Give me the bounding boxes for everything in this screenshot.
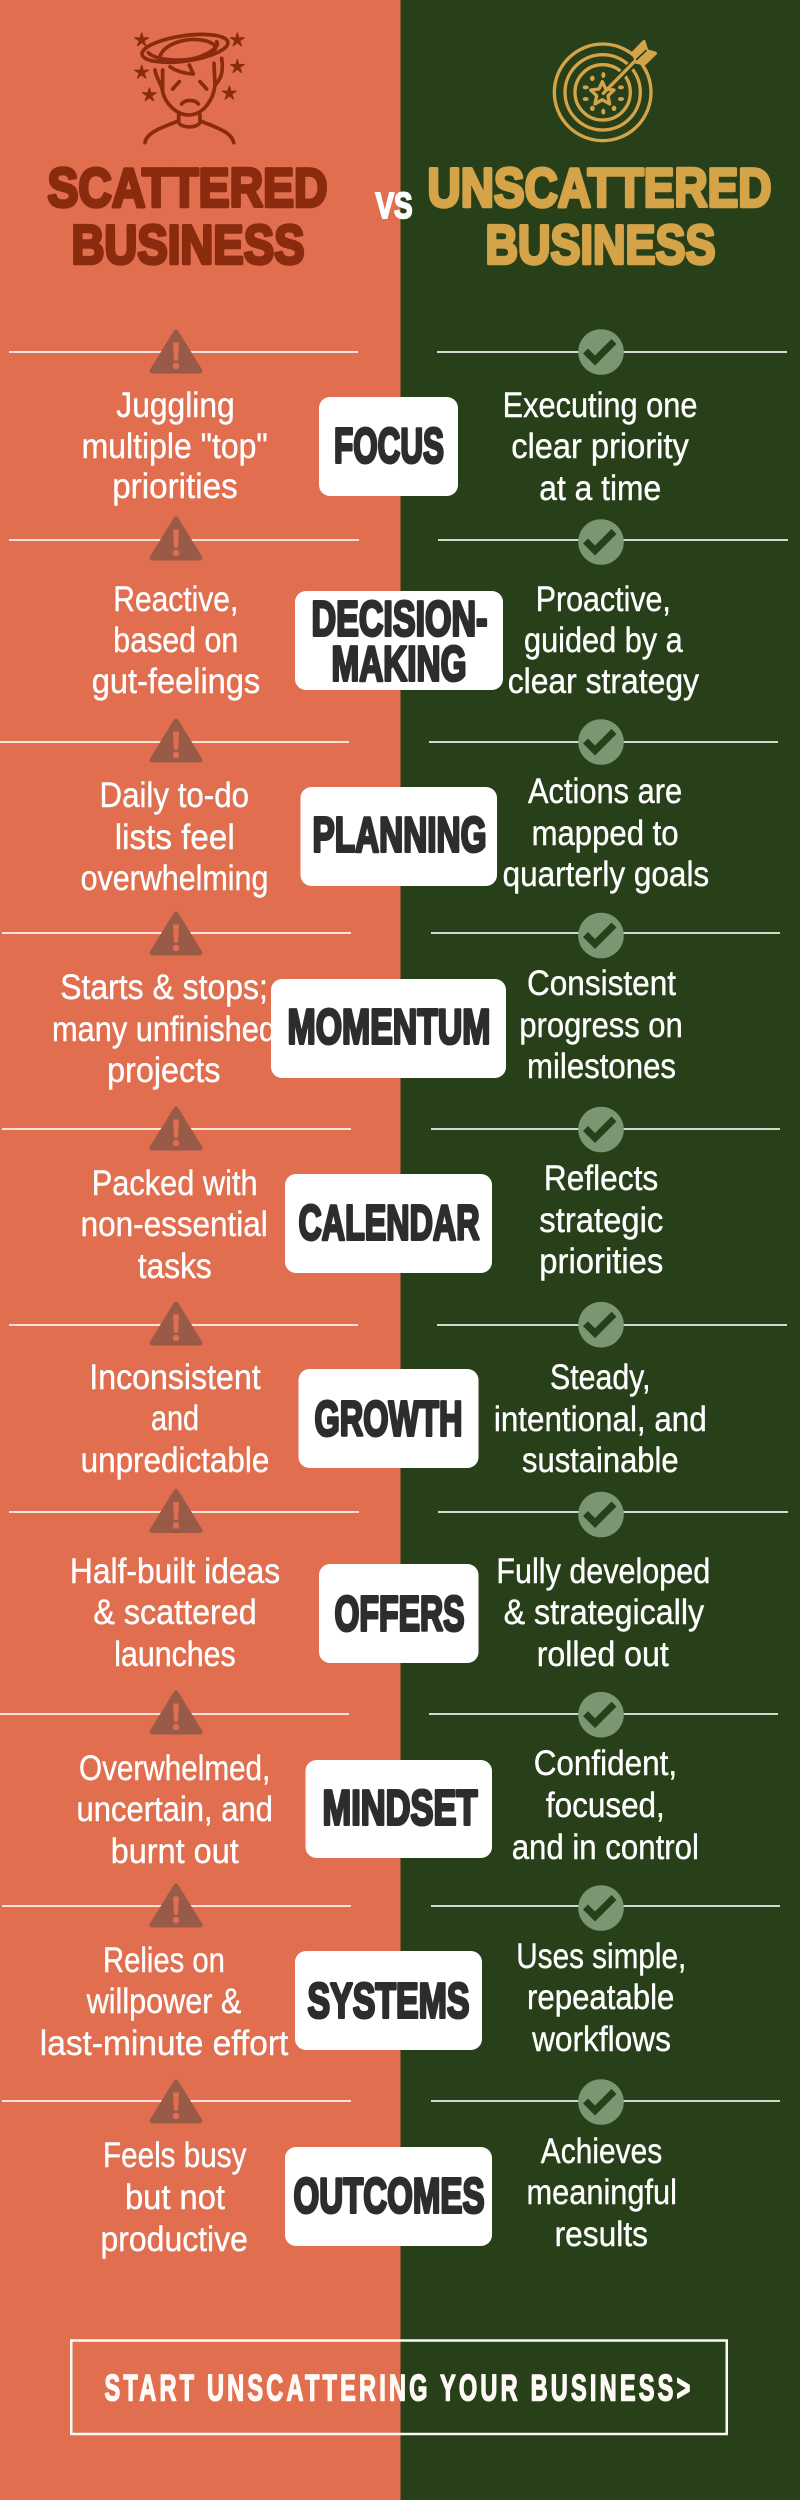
- icon: warning: [152, 1304, 200, 1343]
- text: scattered focus: multiple "top": [82, 427, 268, 466]
- row: outcomes: [2, 2079, 780, 2259]
- text: scattered growth: unpredictable: [81, 1441, 269, 1480]
- text: unscattered offers: & strategically: [504, 1593, 705, 1632]
- text: scattered outcomes: but not: [125, 2178, 225, 2217]
- text: unscattered decision-making: Proactive,: [536, 580, 671, 619]
- icon: check: [578, 2079, 624, 2125]
- icon: warning: [152, 2082, 200, 2121]
- icon: check: [578, 1302, 624, 1348]
- text: scattered offers: & scattered: [93, 1593, 257, 1632]
- text: unscattered planning: Actions are: [528, 772, 682, 811]
- text: scattered planning: [81, 776, 268, 898]
- label pill: growth: GROWTH: [314, 1392, 462, 1446]
- label pill: focus: [319, 397, 458, 496]
- row: focus: [9, 329, 787, 508]
- heading: scattered business: [48, 156, 328, 275]
- text: unscattered growth: Steady,: [550, 1358, 650, 1397]
- icon: warning: [152, 519, 200, 558]
- text: scattered calendar: tasks: [138, 1247, 212, 1286]
- text: scattered growth: Inconsistent: [89, 1358, 261, 1397]
- text: scattered systems: Relies on: [103, 1941, 225, 1980]
- label pill: growth: [298, 1369, 478, 1468]
- icon: warning: [152, 1693, 200, 1732]
- call to action button: [71, 2340, 727, 2434]
- text: unscattered focus: at a time: [539, 469, 661, 508]
- label pill: offers: OFFERS: [334, 1587, 464, 1641]
- heading: scattered business: SCATTERED: [48, 156, 328, 218]
- text: scattered systems: last-minute effort: [40, 2024, 289, 2063]
- icon: warning: [152, 1492, 200, 1530]
- label pill: systems: SYSTEMS: [308, 1974, 470, 2028]
- text: scattered decision-making: [92, 580, 260, 701]
- icon: dizzy person: [135, 30, 244, 143]
- text: scattered outcomes: productive: [100, 2220, 248, 2259]
- text: unscattered calendar: priorities: [539, 1242, 663, 1281]
- text: scattered planning: Daily to-do: [100, 776, 249, 815]
- text: scattered momentum: [52, 968, 276, 1090]
- row: systems: [2, 1885, 780, 2063]
- text: unscattered focus: clear priority: [511, 427, 689, 466]
- text: unscattered mindset: Confident,: [534, 1744, 677, 1783]
- icon: warning: [152, 721, 200, 760]
- text: scattered decision-making: Reactive,: [113, 580, 238, 619]
- icon: check: [578, 1492, 624, 1537]
- icon: check: [578, 913, 624, 958]
- label pill: decision-making: MAKING: [332, 637, 466, 691]
- text: unscattered growth: sustainable: [522, 1441, 679, 1480]
- text: scattered decision-making: based on: [113, 621, 238, 660]
- icon: target with arrow: [554, 42, 655, 141]
- label pill: decision-making: [295, 591, 503, 691]
- label pill: offers: [319, 1564, 478, 1663]
- label pill: planning: PLANNING: [312, 808, 486, 862]
- text: scattered calendar: non-essential: [81, 1205, 268, 1244]
- text: unscattered momentum: [519, 964, 683, 1086]
- label pill: decision-making: DECISION-: [312, 592, 488, 646]
- text: scattered calendar: Packed with: [92, 1164, 258, 1203]
- text: scattered systems: [40, 1941, 289, 2063]
- text: scattered growth: and: [151, 1399, 199, 1438]
- icon: check: [578, 1885, 624, 1931]
- text: unscattered decision-making: [508, 580, 699, 701]
- text: unscattered planning: quarterly goals: [503, 855, 709, 894]
- label pill: mindset: [306, 1760, 492, 1858]
- text: unscattered focus: Executing one: [503, 386, 698, 425]
- text: unscattered outcomes: Achieves: [541, 2132, 662, 2171]
- panel: unscattered background: [400, 0, 800, 2500]
- text: scattered mindset: [76, 1749, 273, 1871]
- row: calendar: [2, 1107, 780, 1286]
- text: scattered growth: [81, 1358, 269, 1480]
- text: scattered momentum: projects: [107, 1051, 220, 1090]
- text: scattered outcomes: Feels busy: [103, 2136, 247, 2175]
- text: unscattered systems: workflows: [531, 2020, 671, 2059]
- text: unscattered systems: repeatable: [527, 1978, 674, 2017]
- text: unscattered momentum: Consistent: [527, 964, 676, 1003]
- row: decision-making: [9, 519, 788, 701]
- text: unscattered offers: [496, 1552, 710, 1674]
- text: scattered planning: overwhelming: [81, 859, 268, 898]
- text: unscattered calendar: Reflects: [544, 1159, 658, 1198]
- row: momentum: [2, 913, 780, 1090]
- label pill: mindset: MINDSET: [322, 1781, 478, 1835]
- text: scattered momentum: Starts & stops;: [60, 968, 268, 1007]
- text: unscattered outcomes: results: [555, 2215, 648, 2254]
- text: unscattered momentum: progress on: [519, 1006, 683, 1045]
- text: scattered decision-making: gut-feelings: [92, 662, 260, 701]
- text: scattered offers: Half-built ideas: [70, 1552, 280, 1591]
- label pill: outcomes: [285, 2147, 492, 2246]
- text: unscattered growth: intentional, and: [494, 1400, 707, 1439]
- icon: check: [578, 1692, 624, 1738]
- label pill: momentum: [271, 979, 506, 1078]
- icon: check: [578, 329, 624, 375]
- icon: warning: [152, 1886, 200, 1925]
- text: scattered planning: lists feel: [115, 818, 235, 857]
- text: scattered focus: [82, 386, 268, 506]
- heading: scattered business: BUSINESS: [72, 213, 304, 275]
- text: unscattered decision-making: clear strategy: [508, 662, 699, 701]
- text: unscattered offers: Fully developed: [496, 1552, 710, 1591]
- text: unscattered momentum: milestones: [527, 1047, 676, 1086]
- text: scattered offers: launches: [114, 1635, 236, 1674]
- text: unscattered growth: [494, 1358, 707, 1480]
- icon: check: [578, 1107, 624, 1152]
- text: unscattered mindset: [512, 1744, 699, 1867]
- icon: warning: [152, 1109, 200, 1148]
- row: mindset: [0, 1692, 778, 1871]
- text: scattered systems: willpower &: [86, 1982, 241, 2021]
- label pill: calendar: CALENDAR: [298, 1196, 480, 1250]
- text: unscattered planning: [503, 772, 709, 894]
- text: unscattered systems: [516, 1937, 686, 2059]
- icon: warning: [152, 914, 200, 953]
- text: scattered mindset: Overwhelmed,: [79, 1749, 270, 1788]
- icon: warning: [152, 332, 200, 371]
- text: scattered calendar: [81, 1164, 268, 1286]
- text: unscattered mindset: and in control: [512, 1828, 699, 1867]
- panel: scattered background: [0, 0, 400, 2500]
- icon: check: [578, 719, 624, 765]
- label pill: systems: [295, 1951, 482, 2050]
- text: unscattered calendar: strategic: [539, 1201, 663, 1240]
- text: scattered mindset: burnt out: [111, 1832, 239, 1871]
- heading: unscattered business: [428, 156, 772, 275]
- text: scattered mindset: uncertain, and: [76, 1790, 273, 1829]
- icon: check: [578, 519, 624, 565]
- heading: unscattered business: BUSINESS: [486, 213, 716, 275]
- text: unscattered decision-making: guided by a: [524, 621, 683, 660]
- row: offers: [9, 1492, 788, 1674]
- text: scattered focus: Juggling: [116, 386, 235, 425]
- heading: vs: VS: [376, 185, 412, 226]
- row: growth: [9, 1302, 787, 1480]
- row: planning: [0, 719, 778, 898]
- text: unscattered outcomes: meaningful: [526, 2173, 677, 2212]
- label pill: momentum: MOMENTUM: [288, 1000, 490, 1054]
- text: unscattered focus: [503, 386, 698, 508]
- text: unscattered calendar: [539, 1159, 663, 1281]
- text: unscattered planning: mapped to: [532, 814, 679, 853]
- text: scattered offers: [70, 1552, 280, 1674]
- label pill: planning: [300, 787, 497, 886]
- text: unscattered offers: rolled out: [537, 1635, 669, 1674]
- text: unscattered systems: Uses simple,: [516, 1937, 686, 1976]
- text: scattered outcomes: [100, 2136, 248, 2259]
- text: scattered momentum: many unfinished: [52, 1010, 276, 1049]
- label pill: focus: FOCUS: [334, 419, 444, 473]
- text: scattered focus: priorities: [112, 467, 238, 506]
- label pill: calendar: [285, 1174, 492, 1273]
- text: unscattered outcomes: [526, 2132, 677, 2254]
- text: unscattered mindset: focused,: [546, 1786, 665, 1825]
- label pill: outcomes: OUTCOMES: [294, 2169, 484, 2223]
